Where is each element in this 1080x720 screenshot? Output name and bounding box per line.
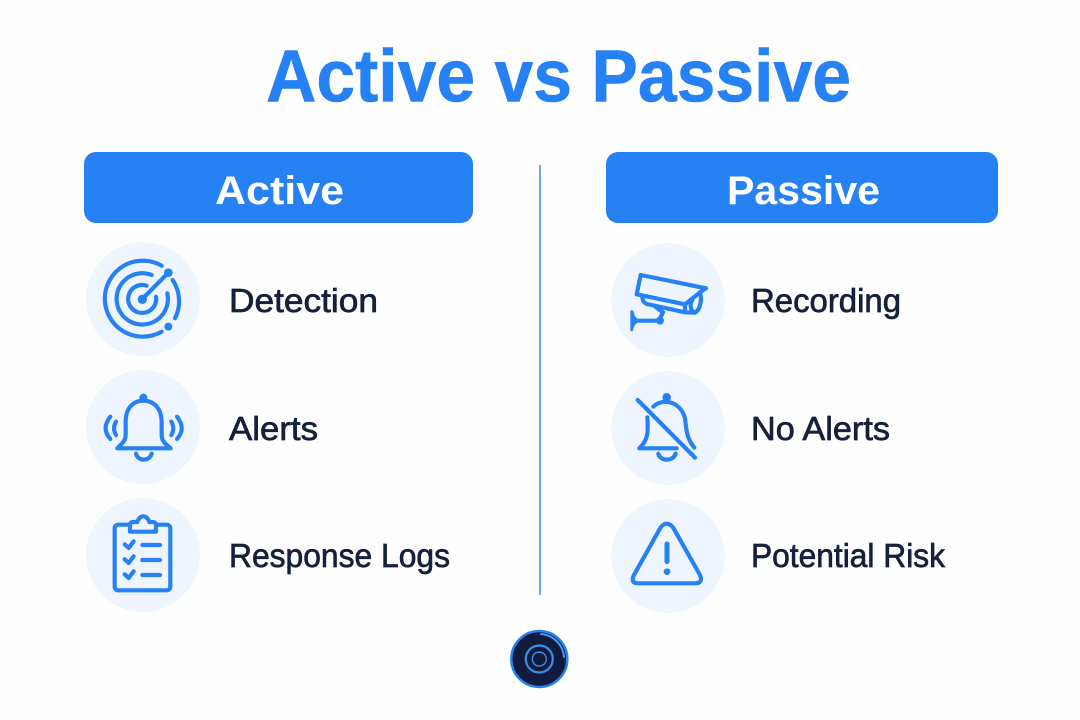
label: No Alerts: No Alerts [751,411,890,448]
panel: active header: Active [215,169,344,213]
icon: security camera [611,243,725,357]
divider [539,165,541,595]
label: Alerts: Alerts [229,411,318,448]
title: Active vs Passive [266,34,851,118]
panel: passive header [606,152,998,223]
icon: ringing bell [86,370,200,484]
panel: passive header: Passive [727,169,880,213]
icon: muted bell [611,371,725,485]
label: Detection: Detection [229,283,378,320]
icon: bottom disc logo [511,631,567,687]
icon: clipboard [86,498,200,612]
label: Potential Risk: Potential Risk [751,538,945,575]
panel: active header [84,152,473,223]
icon: warning triangle [611,499,725,613]
label: Response Logs: Response Logs [229,538,450,575]
label: Recording: Recording [751,283,901,320]
icon: radar [86,242,200,356]
